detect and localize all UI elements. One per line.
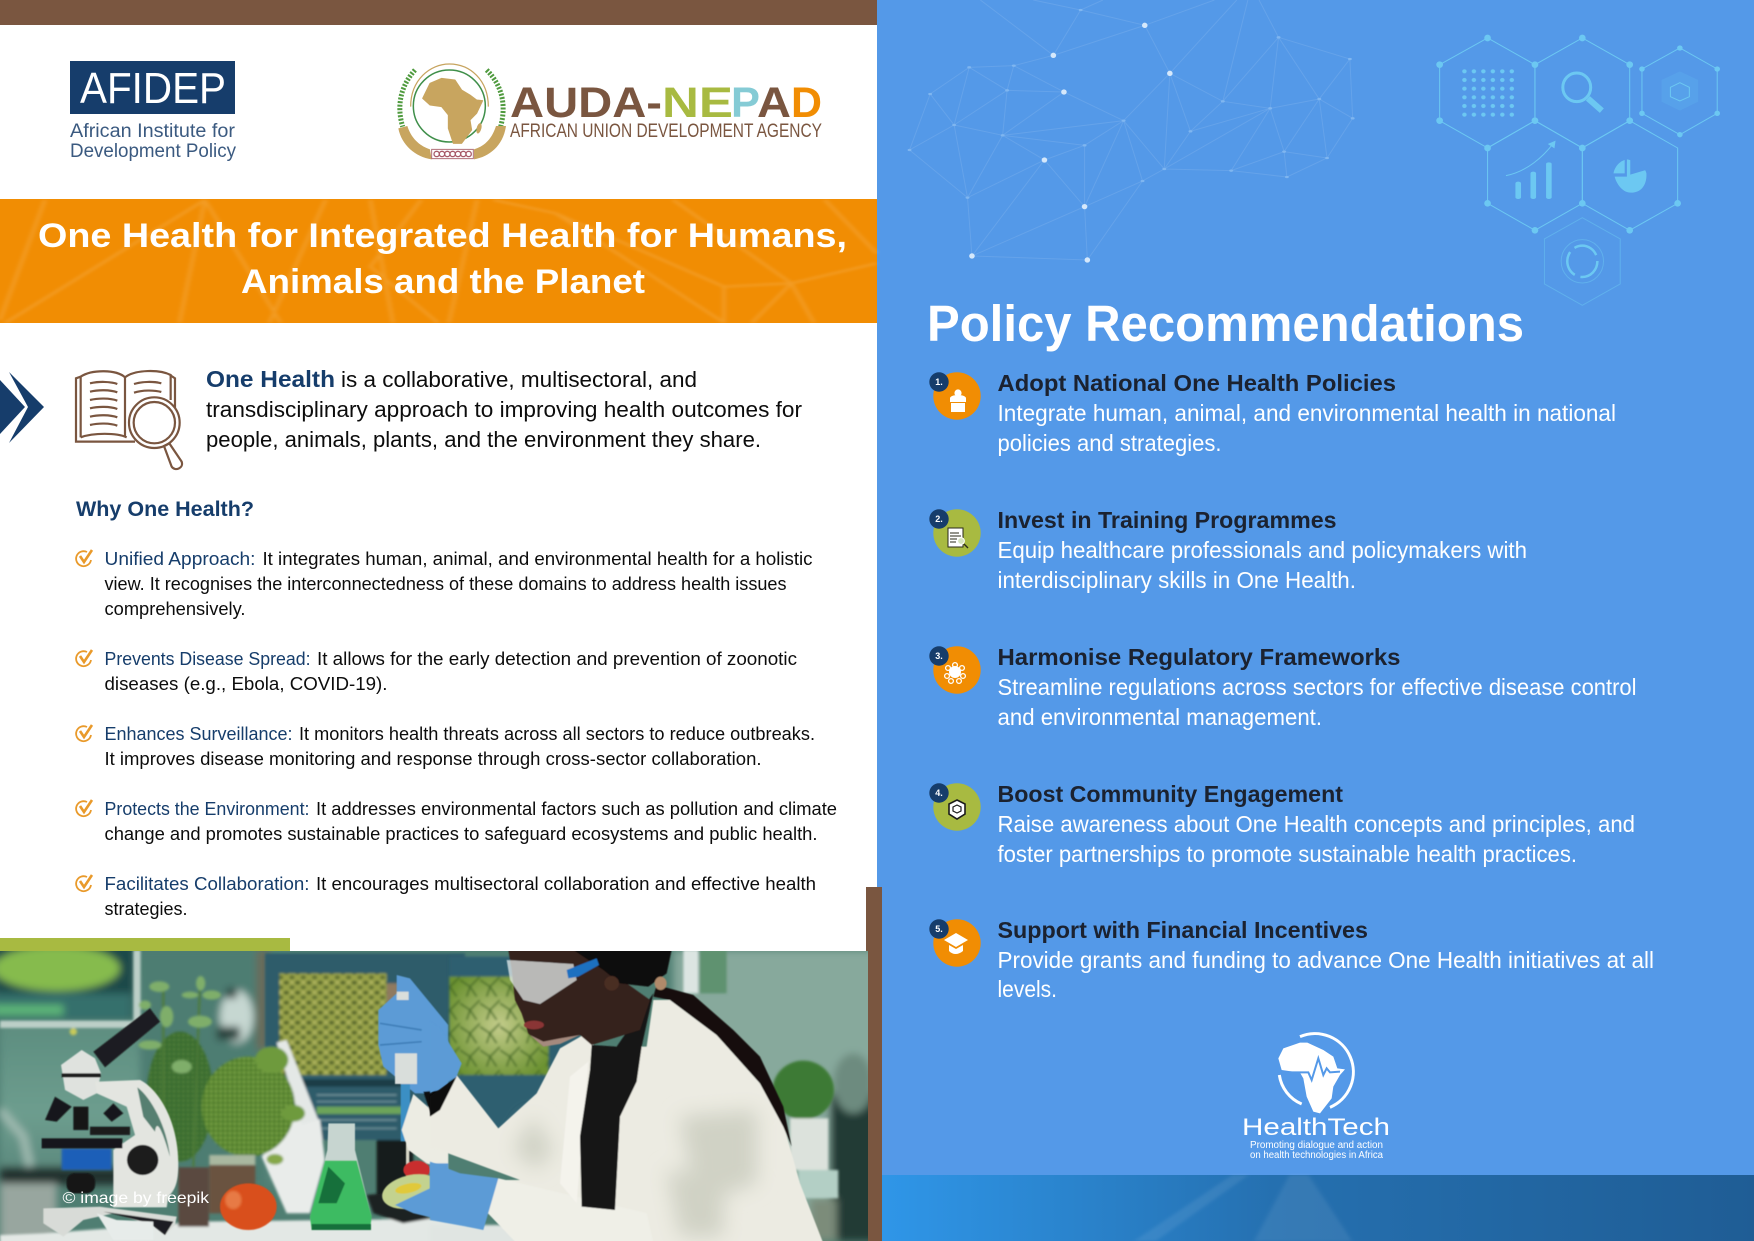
icon: podium on orange circle bbox=[933, 372, 981, 420]
logo: HealthTech: on health technologies in Africa bbox=[1250, 1150, 1383, 1161]
monitor right part bbox=[449, 957, 580, 1132]
number badge bbox=[929, 509, 949, 529]
recommendation 2: interdisciplinary skills in One Health. bbox=[998, 567, 1356, 593]
decoration: hexagon analytics icons bbox=[1436, 35, 1720, 305]
recommendation 4: Raise awareness about One Health concepts and principles, and bbox=[998, 811, 1635, 837]
icon: document with magnifier on green circle bbox=[933, 509, 981, 557]
list item: Unified Approach: view. It recognises the interconnectedness of these domains to address health issues bbox=[104, 573, 786, 594]
recommendation 5: Provide grants and funding to advance One Health initiatives at all bbox=[998, 947, 1654, 973]
glove right edge bbox=[429, 1040, 462, 1094]
icon: check bbox=[76, 875, 92, 891]
logo: AUDA-NEPAD bbox=[398, 64, 822, 159]
text block: One Health definition: is a collaborative, multisectoral, and bbox=[341, 367, 697, 392]
flask bbox=[310, 1123, 372, 1230]
recommendation 2: Invest in Training Programmes bbox=[998, 507, 1336, 533]
list item: Unified Approach: comprehensively. bbox=[104, 598, 246, 619]
list item: Enhances Surveillance: It monitors health threats across all sectors to reduce outbreaks. bbox=[299, 723, 815, 744]
list item: Facilitates Collaboration: strategies. bbox=[104, 898, 188, 919]
number badge bbox=[929, 372, 949, 392]
heading: Why One Health?: Why One Health? bbox=[76, 498, 254, 521]
title text: Animals and the Planet bbox=[241, 263, 645, 301]
table bbox=[0, 1218, 467, 1241]
microscope bbox=[42, 975, 448, 1240]
list item: Protects the Environment: Protects the Environment: bbox=[104, 798, 310, 819]
tomato bbox=[220, 1183, 277, 1230]
heading: Policy Recommendations: Policy Recommendations bbox=[927, 295, 1524, 352]
list item: Facilitates Collaboration bbox=[76, 873, 816, 919]
petri dish bbox=[403, 1161, 430, 1179]
logo: AUDA-NEPAD: A bbox=[757, 79, 791, 127]
recommendation 5: Support with Financial Incentives bbox=[998, 917, 1368, 943]
left half of photo bbox=[0, 943, 467, 1241]
title text: One Health for Integrated Health for Humans, bbox=[38, 217, 847, 255]
plant two bbox=[202, 1057, 295, 1157]
icon: graduation cap on orange circle bbox=[933, 919, 981, 967]
list item: Prevents Disease Spread bbox=[76, 648, 797, 694]
list item: Facilitates Collaboration: It encourages multisectoral collaboration and effective health bbox=[316, 873, 816, 894]
list item: Unified Approach: It integrates human, animal, and environmental health for a holistic bbox=[262, 548, 812, 569]
gloved hand and pipette bbox=[378, 975, 448, 1093]
icon: African Union emblem bbox=[398, 64, 506, 159]
icon: Africa with pulse ring bbox=[1278, 1034, 1353, 1113]
number badge: 5. bbox=[935, 924, 943, 934]
photo credit: © image by freepik bbox=[62, 1190, 210, 1207]
lower glove bbox=[430, 1162, 498, 1230]
keyboard bbox=[367, 1193, 432, 1223]
text block: One Health definition: transdisciplinary approach to improving health outcomes for bbox=[206, 397, 802, 422]
icon: open book with magnifier bbox=[76, 371, 182, 469]
recommendation 1: policies and strategies. bbox=[998, 430, 1222, 456]
logo: HealthTech bbox=[1242, 1034, 1390, 1161]
brown vertical strip bbox=[866, 887, 882, 1241]
icon: check bbox=[76, 725, 92, 741]
icon: check bbox=[76, 800, 92, 816]
recommendation 1: Adopt National One Health Policies bbox=[998, 370, 1396, 396]
recommendation 3: and environmental management. bbox=[998, 704, 1322, 730]
text block: One Health definition: One Health bbox=[206, 366, 335, 392]
number badge bbox=[929, 783, 949, 803]
logo: AUDA-NEPAD: AFRICAN UNION DEVELOPMENT AGENCY bbox=[510, 120, 822, 142]
number badge bbox=[929, 919, 949, 939]
decoration: network constellation bbox=[908, 0, 1355, 263]
logo: AFIDEP: Development Policy bbox=[70, 141, 236, 162]
logo: HealthTech: HealthTech bbox=[1242, 1114, 1390, 1141]
icon: gear hexagon on green circle bbox=[933, 783, 981, 831]
recommendation 3 bbox=[929, 644, 1636, 730]
sleeve bbox=[402, 1094, 448, 1170]
list item: Enhances Surveillance: Enhances Surveillance: bbox=[104, 723, 292, 744]
hair bbox=[573, 950, 672, 987]
logo: AUDA-NEPAD: AUDA- bbox=[510, 79, 662, 127]
title text bbox=[38, 217, 847, 301]
list item: Unified Approach: Unified Approach: bbox=[104, 548, 255, 569]
logo: AFIDEP bbox=[70, 61, 236, 162]
recommendation 3: Streamline regulations across sectors for effective disease control bbox=[998, 674, 1636, 700]
logo: AFIDEP: AFIDEP bbox=[80, 64, 226, 113]
list item: Protects the Environment bbox=[76, 798, 837, 844]
recommendation 3: Harmonise Regulatory Frameworks bbox=[998, 644, 1400, 670]
recommendation 1 bbox=[929, 370, 1616, 456]
recommendation 2: Equip healthcare professionals and policymakers with bbox=[998, 537, 1527, 563]
photo: scientist in laboratory bbox=[0, 943, 880, 1241]
title banner bbox=[0, 199, 877, 323]
list item: Protects the Environment: It addresses environmental factors such as pollution and climate bbox=[316, 798, 837, 819]
table bbox=[430, 1225, 520, 1241]
monitor bbox=[377, 1137, 413, 1197]
list item: Enhances Surveillance bbox=[76, 723, 815, 769]
list item: Facilitates Collaboration: Facilitates Collaboration: bbox=[104, 873, 310, 894]
recommendation 4 bbox=[929, 781, 1635, 867]
list item: Protects the Environment: change and promotes sustainable practices to safeguard ecosystems and public health. bbox=[104, 823, 818, 844]
green accent bar bbox=[0, 938, 290, 951]
lab coat bbox=[430, 1000, 823, 1241]
number badge: 4. bbox=[935, 788, 943, 798]
panel: right blue background bbox=[877, 0, 1754, 1241]
icon: navy chevrons bbox=[0, 372, 44, 443]
pots bbox=[178, 1167, 209, 1227]
number badge: 3. bbox=[935, 651, 943, 661]
plant one bbox=[147, 1032, 213, 1162]
recommendation 5 bbox=[929, 917, 1654, 1002]
logo: HealthTech: Promoting dialogue and action bbox=[1250, 1140, 1383, 1151]
recommendation 2 bbox=[929, 507, 1527, 593]
text block: One Health definition bbox=[206, 366, 802, 452]
number badge bbox=[929, 646, 949, 666]
logo: AUDA-NEPAD: NE bbox=[662, 79, 733, 127]
text block: One Health definition: people, animals, plants, and the environment they share. bbox=[206, 427, 761, 452]
face bbox=[508, 950, 650, 1047]
list item: Unified Approach bbox=[76, 548, 813, 619]
recommendation 5: levels. bbox=[998, 976, 1057, 1002]
icon: check bbox=[76, 550, 92, 566]
number badge: 1. bbox=[935, 377, 943, 387]
recommendation 4: Boost Community Engagement bbox=[998, 781, 1343, 807]
white box and pipette bbox=[262, 1110, 325, 1213]
background plant and pot bbox=[773, 1061, 834, 1119]
right half of photo bbox=[430, 950, 880, 1241]
top brown bar bbox=[0, 0, 877, 25]
goggles bbox=[507, 960, 577, 1004]
icon: check bbox=[76, 650, 92, 666]
list item: Prevents Disease Spread: It allows for the early detection and prevention of zoonotic bbox=[317, 648, 797, 669]
logo: AUDA-NEPAD: D bbox=[791, 79, 822, 127]
bottom gradient band bbox=[882, 1175, 1754, 1241]
icon: people network on orange circle bbox=[933, 646, 981, 694]
list item: Prevents Disease Spread: diseases (e.g., Ebola, COVID-19). bbox=[104, 673, 388, 694]
logo: AUDA-NEPAD: P bbox=[731, 79, 760, 127]
list item: Prevents Disease Spread: Prevents Disease Spread: bbox=[104, 648, 310, 669]
ponytail bbox=[653, 985, 792, 1147]
turtleneck bbox=[580, 993, 653, 1210]
recommendation 4: foster partnerships to promote sustainable health practices. bbox=[998, 841, 1577, 867]
list item: Enhances Surveillance: It improves disease monitoring and response through cross-sector collaboration. bbox=[104, 748, 762, 769]
number badge: 2. bbox=[935, 514, 943, 524]
logo: AFIDEP: African Institute for bbox=[70, 121, 236, 142]
recommendation 1: Integrate human, animal, and environmental health in national bbox=[998, 400, 1616, 426]
